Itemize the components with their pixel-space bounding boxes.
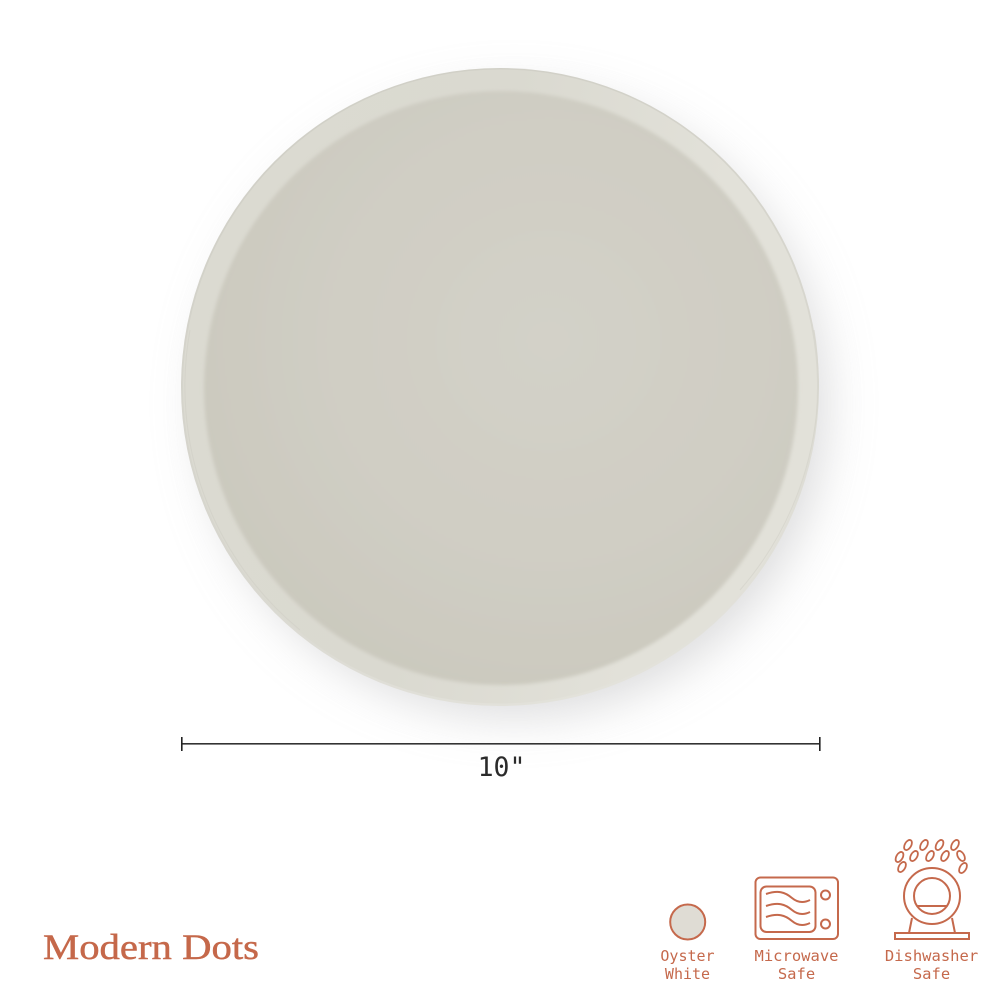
label: microwave safe: Microwave [754, 947, 838, 965]
label: oyster white: Oyster [660, 947, 715, 965]
label: dishwasher safe: Dishwasher [885, 947, 978, 965]
plate shadow [202, 92, 826, 716]
brand name: Modern Dots [43, 927, 259, 967]
label: dishwasher safe: Safe [913, 965, 950, 983]
dimension line [181, 737, 821, 751]
icon: oyster white swatch [670, 904, 705, 940]
icon: dishwasher [894, 839, 969, 939]
label: oyster white: White [665, 965, 710, 983]
label: microwave safe [754, 947, 838, 983]
label: oyster white [660, 947, 715, 983]
icon: microwave [756, 878, 838, 939]
dimension label: 10" [478, 752, 525, 783]
label: dishwasher safe [885, 947, 978, 983]
label: microwave safe: Safe [778, 965, 815, 983]
plate [181, 68, 819, 706]
